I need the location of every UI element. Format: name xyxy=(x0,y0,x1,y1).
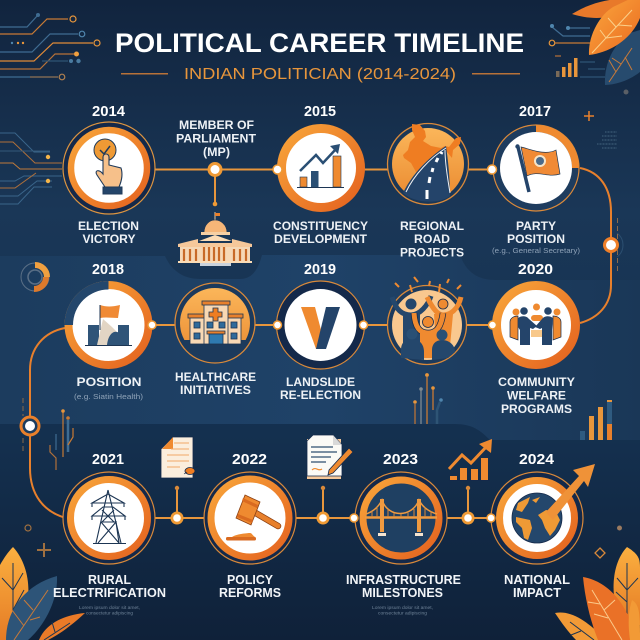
milestone: 2024 national impact xyxy=(491,452,595,600)
milestone: 2018 position: POSITION xyxy=(76,377,142,389)
milestone: 2014 election victory: ELECTION xyxy=(78,221,139,233)
milestone: healthcare initiatives: HEALTHCARE xyxy=(175,372,256,384)
milestone: 2022 policy reforms: POLICY xyxy=(227,572,273,587)
milestone: member of parliament: (MP) xyxy=(203,147,230,159)
milestone: 2017 party position xyxy=(492,104,581,255)
milestone: 2023 infrastructure milestones: Lorem ipsum dolor sit amet, xyxy=(372,605,433,610)
milestone: crowd celebrating xyxy=(388,277,466,364)
milestone: regional road projects: REGIONAL xyxy=(400,221,464,233)
icon: gavel xyxy=(226,495,278,540)
milestone: 2021 rural electrification: RURAL xyxy=(88,572,131,587)
icon: document with pen xyxy=(307,435,353,479)
milestone: 2023 infrastructure milestones xyxy=(346,452,461,616)
milestone: 2022 policy reforms xyxy=(204,452,296,600)
milestone: 2018 position: (e.g. Siatin Health) xyxy=(74,392,144,401)
milestone: 2017 party position: 2017 xyxy=(519,104,551,120)
milestone: 2017 party position: PARTY xyxy=(516,221,556,233)
icon: confetti xyxy=(395,277,461,292)
milestone: 2021 rural electrification: ELECTRIFICATION xyxy=(53,585,166,600)
milestone: 2023 infrastructure milestones: 2023 xyxy=(383,452,418,468)
milestone: 2017 party position: POSITION xyxy=(507,234,565,246)
milestone: 2020 community welfare programs: 2020 xyxy=(518,262,553,278)
decoration: bar chart right band xyxy=(580,400,612,440)
milestone: 2020 community welfare programs: COMMUNITY xyxy=(498,377,575,389)
node: left bend xyxy=(21,398,39,454)
subtitle: INDIAN POLITICIAN (2014-2024) xyxy=(184,66,456,83)
decoration: circuit and bars top right xyxy=(549,24,605,77)
icon: hand voting xyxy=(94,139,122,194)
milestone: 2023 infrastructure milestones: MILESTONES xyxy=(362,585,443,600)
milestone: 2023 infrastructure milestones: consectetur adipiscing xyxy=(378,610,428,616)
milestone: regional road projects: PROJECTS xyxy=(400,248,464,260)
milestone: 2017 party position: (e.g., General Secretary) xyxy=(492,246,581,255)
milestone: member of parliament: MEMBER OF xyxy=(179,120,254,132)
icon: bar chart with arrow xyxy=(297,144,344,188)
milestone: 2021 rural electrification: consectetur adipiscing xyxy=(86,610,134,616)
milestone: 2019 landslide re-election: LANDSLIDE xyxy=(286,377,355,389)
node: right bend xyxy=(603,218,623,272)
circuit decoration: left of 2014 xyxy=(0,133,62,204)
timeline connectors xyxy=(30,168,611,518)
milestone: 2015 constituency development: CONSTITUENCY xyxy=(273,221,368,233)
node: 2022 to 2023 xyxy=(316,486,330,524)
decoration: plus, dots and tiny text lines xyxy=(25,90,628,558)
milestone: 2022 policy reforms: REFORMS xyxy=(219,585,281,600)
icon: crowd xyxy=(392,296,461,360)
icon: document with bug xyxy=(161,437,199,478)
milestone: healthcare initiatives xyxy=(175,283,256,397)
milestone: 2014 election victory xyxy=(63,104,155,246)
icon: india map xyxy=(403,124,461,181)
milestone: member of parliament xyxy=(176,120,256,266)
milestone: 2020 community welfare programs: WELFARE xyxy=(507,390,566,402)
icon: flag over city xyxy=(85,305,132,346)
middle band xyxy=(0,255,640,440)
node: 2021 to 2022 xyxy=(170,486,184,524)
milestone: 2014 election victory: 2014 xyxy=(92,104,125,120)
leaves: top right xyxy=(572,0,640,85)
milestone: 2021 rural electrification: Lorem ipsum dolor sit amet, xyxy=(79,605,140,610)
decoration: circuit pins below crowd xyxy=(413,373,443,424)
icon: V mark xyxy=(301,307,340,349)
title: POLITICAL CAREER TIMELINE xyxy=(115,28,524,58)
circuit decoration: top left xyxy=(0,13,100,80)
icon: growth chart xyxy=(449,439,492,480)
icon: flag xyxy=(515,144,560,192)
milestone: 2015 constituency development: DEVELOPMENT xyxy=(274,234,367,246)
icon: rising arrow xyxy=(546,464,595,520)
icon: hospital xyxy=(188,301,243,344)
milestone: 2024 national impact: IMPACT xyxy=(513,585,561,600)
decoration: donut chart xyxy=(21,263,49,291)
milestone: member of parliament: PARLIAMENT xyxy=(176,134,256,146)
milestone: 2014 election victory: VICTORY xyxy=(82,234,136,246)
icon: globe xyxy=(512,493,562,543)
node: 2023 to 2024 xyxy=(462,486,474,524)
milestone: 2019 landslide re-election: 2019 xyxy=(304,262,336,278)
icon: road xyxy=(403,146,450,202)
icon: community handshake xyxy=(510,304,561,345)
milestone: 2021 rural electrification xyxy=(53,452,166,616)
milestone: 2022 policy reforms: 2022 xyxy=(232,452,267,468)
milestone: 2015 constituency development xyxy=(273,104,368,246)
leaves: bottom left xyxy=(0,547,85,640)
leaves: bottom right xyxy=(555,547,640,640)
milestone: 2019 landslide re-election xyxy=(276,262,364,402)
milestone: 2024 national impact: NATIONAL xyxy=(504,572,570,587)
milestone: 2018 position xyxy=(64,262,148,401)
icon: parliament building xyxy=(178,212,252,266)
milestone: 2015 constituency development: 2015 xyxy=(304,104,336,120)
icon: power tower xyxy=(92,490,126,544)
node: MP xyxy=(208,162,222,206)
milestone: 2018 position: 2018 xyxy=(92,262,124,278)
node: small connectors on circles xyxy=(148,165,496,522)
milestone: 2024 national impact: 2024 xyxy=(519,452,554,468)
milestone: regional road projects xyxy=(388,124,468,260)
milestone: healthcare initiatives: INITIATIVES xyxy=(180,385,251,397)
decoration: circuit pins centre left xyxy=(50,409,73,470)
milestone: 2020 community welfare programs xyxy=(496,262,576,416)
milestone: 2020 community welfare programs: PROGRAMS xyxy=(501,404,572,416)
milestone: regional road projects: ROAD xyxy=(414,234,450,246)
milestone: 2021 rural electrification: 2021 xyxy=(92,452,124,468)
milestone: 2023 infrastructure milestones: INFRASTRUCTURE xyxy=(346,572,461,587)
icon: bridge xyxy=(365,499,437,536)
milestone: 2019 landslide re-election: RE-ELECTION xyxy=(280,390,361,402)
